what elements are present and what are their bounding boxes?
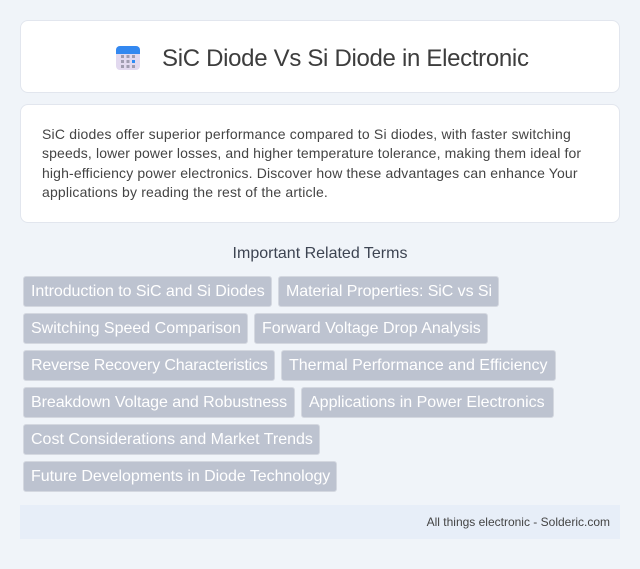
tag: Cost Considerations and Market Trends <box>31 431 313 448</box>
tag <box>254 313 488 344</box>
text block: description: high-efficiency power electronics. Discover how these advantages can enhance Your <box>42 165 578 181</box>
tag <box>281 350 556 381</box>
heading: related terms: Important Related Terms <box>233 245 407 262</box>
tag list <box>23 276 556 492</box>
tag: Introduction to SiC and Si Diodes <box>31 283 265 300</box>
text block: description <box>42 126 581 200</box>
tag <box>23 387 295 418</box>
tag: Forward Voltage Drop Analysis <box>262 320 481 337</box>
tag <box>23 424 320 455</box>
tag: Future Developments in Diode Technology <box>31 468 330 485</box>
tag: Applications in Power Electronics <box>309 394 545 411</box>
icon: calendar <box>116 46 140 70</box>
tag: Breakdown Voltage and Robustness <box>31 394 287 411</box>
tag <box>278 276 499 307</box>
tag: Material Properties: SiC vs Si <box>286 283 492 300</box>
tag <box>23 461 337 492</box>
tag <box>23 350 275 381</box>
title: SiC Diode Vs Si Diode in Electronic <box>162 45 529 72</box>
text block: description: speeds, lower power losses, and higher temperature tolerance, making them ideal for <box>42 145 581 161</box>
tag <box>23 276 272 307</box>
tag <box>301 387 554 418</box>
tag <box>23 313 248 344</box>
panel: description <box>20 104 620 223</box>
text block: description: applications by reading the rest of the article. <box>42 184 328 200</box>
footer text: All things electronic - Solderic.com <box>427 515 610 529</box>
panel: header <box>20 20 620 93</box>
tag: Switching Speed Comparison <box>31 320 241 337</box>
footer <box>20 505 620 539</box>
tag: Thermal Performance and Efficiency <box>289 357 547 374</box>
tag: Reverse Recovery Characteristics <box>31 357 268 374</box>
text block: description: SiC diodes offer superior performance compared to Si diodes, with faster switching <box>42 126 571 142</box>
